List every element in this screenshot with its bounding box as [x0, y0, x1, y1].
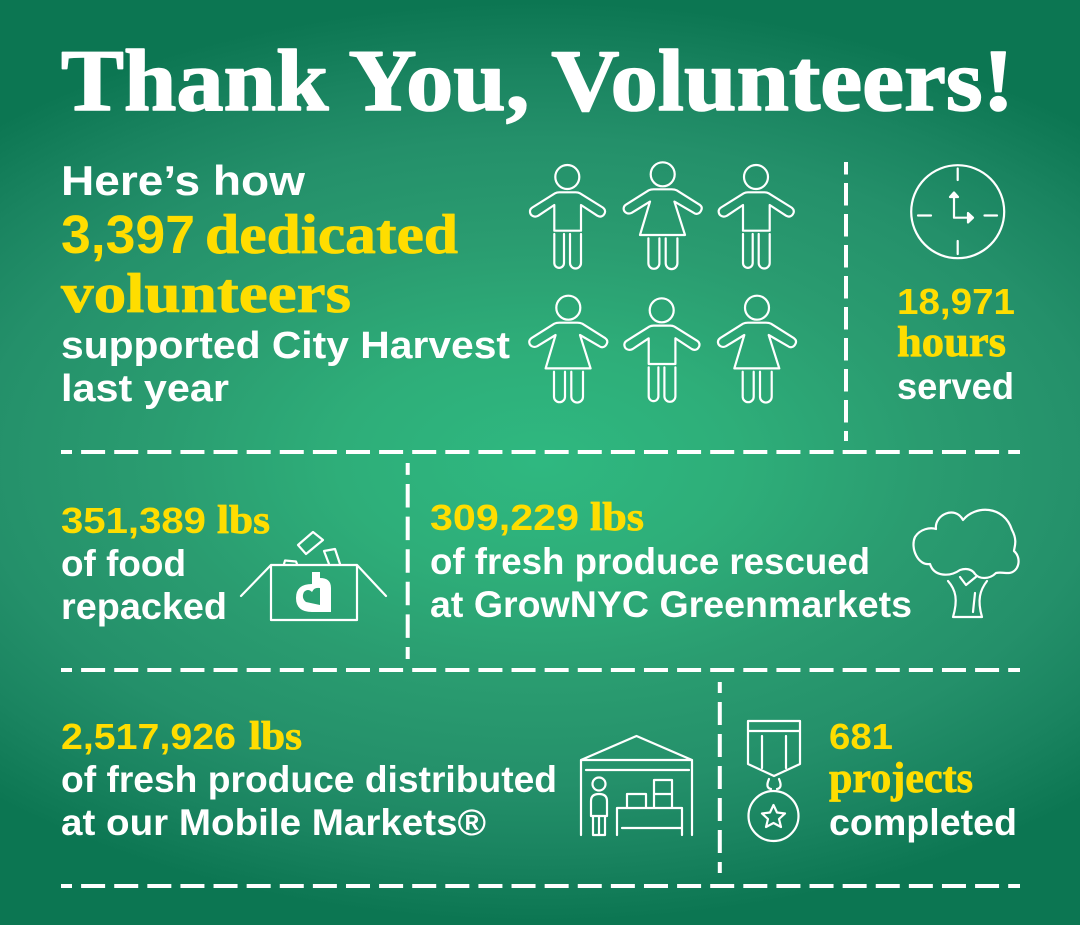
icon: medal: [748, 721, 800, 841]
intro text block: volunteers: [61, 263, 351, 325]
stat: produce distributed: 2,517,926: [61, 716, 236, 757]
stat: hours served: hours: [897, 319, 1006, 366]
intro text block: [61, 157, 510, 410]
stat: food repacked: 351,389: [61, 500, 206, 541]
intro text block: dedicated: [205, 204, 458, 266]
stat: produce rescued: at GrowNYC Greenmarkets: [430, 584, 912, 625]
stat: food repacked: of food: [61, 543, 186, 584]
stat: produce rescued: of fresh produce rescued: [430, 541, 870, 582]
stat: produce rescued: [430, 494, 912, 625]
icon: six volunteers: [529, 162, 796, 403]
stat: food repacked: repacked: [61, 586, 227, 627]
stat: projects completed: 681: [829, 716, 893, 757]
stat: projects completed: projects: [829, 755, 973, 802]
stat: food repacked: [61, 497, 270, 627]
stat: projects completed: completed: [829, 802, 1017, 843]
stat: projects completed: [829, 716, 1017, 843]
stat: produce rescued: 309,229: [430, 497, 579, 538]
stat: produce distributed: of fresh produce distributed: [61, 759, 557, 800]
icon: mobile market tent: [581, 736, 692, 835]
stat: food repacked: lbs: [217, 497, 270, 542]
stat: hours served: served: [897, 366, 1014, 407]
stat: hours served: 18,971: [897, 281, 1015, 322]
stat: produce distributed: at our Mobile Markets®: [61, 802, 486, 843]
intro text block: supported City Harvest: [61, 325, 510, 367]
intro text block: Here’s how: [61, 157, 305, 204]
stat: produce distributed: lbs: [249, 713, 302, 758]
stat: hours served: [897, 281, 1015, 407]
stat: produce distributed: [61, 713, 557, 843]
icon: clock: [911, 165, 1004, 258]
stat: produce rescued: lbs: [590, 494, 644, 539]
icon: food box: [241, 532, 386, 620]
title: Thank You, Volunteers!: [61, 33, 1014, 130]
intro text block: 3,397: [61, 205, 195, 265]
icon: tree: [913, 510, 1019, 617]
intro text block: last year: [61, 368, 229, 410]
